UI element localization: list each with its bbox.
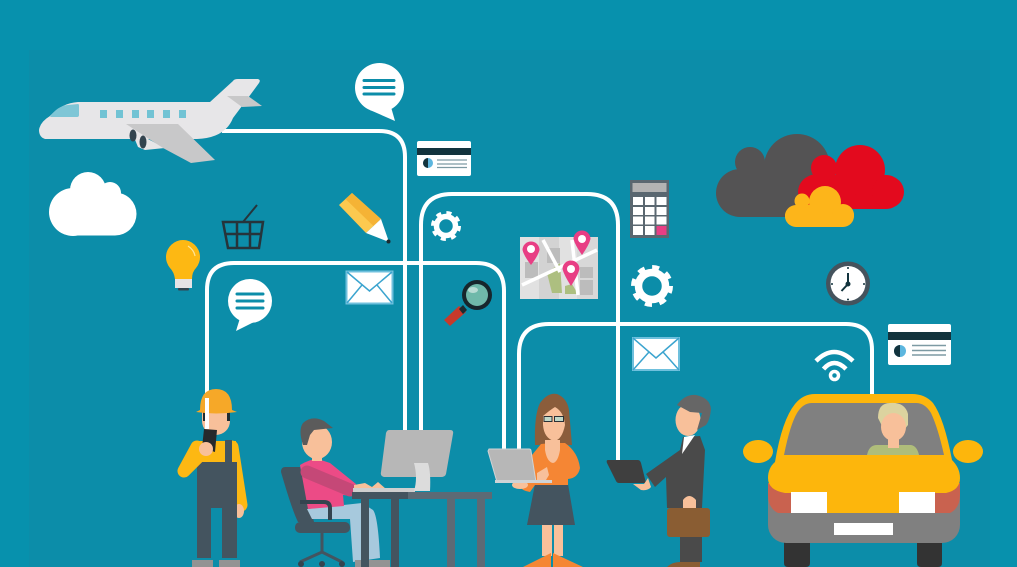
keyboard: [353, 488, 415, 492]
right arm: [232, 447, 241, 505]
chair base: [300, 533, 342, 562]
icon: wifi: [816, 352, 853, 380]
briefcase: [667, 508, 710, 537]
head: [202, 412, 230, 435]
person: woman with laptop: [488, 394, 583, 567]
person: businessman with tablet: [607, 395, 711, 567]
legs: [307, 503, 380, 562]
license plate: [834, 523, 893, 535]
glasses: [544, 416, 564, 422]
top: [518, 443, 580, 492]
desk with monitor: [352, 430, 492, 567]
driver: [867, 403, 919, 455]
mirrors: [743, 440, 773, 463]
icon: envelope left: [346, 272, 392, 304]
skirt: [527, 484, 575, 525]
connector line: drop to worker: [205, 398, 209, 429]
shirt: [300, 459, 356, 509]
monitor stand: [414, 463, 430, 491]
icon: worker phone and hand: [199, 429, 217, 456]
car: [743, 394, 983, 567]
briefcase hand: [683, 496, 696, 509]
connector line: laptop to car: [519, 324, 872, 451]
person: construction worker: [184, 389, 244, 567]
icon: credit card upper: [417, 141, 471, 176]
shoes: [523, 553, 583, 567]
connector line: plane to desktop monitor: [222, 131, 405, 432]
hands: [354, 482, 386, 489]
yellow body: [768, 394, 960, 513]
laptop: [488, 449, 536, 482]
icon: speech bubble upper: [355, 63, 404, 121]
yellow cloud: [785, 186, 854, 227]
icon: shopping basket: [223, 205, 263, 248]
wheels: [784, 540, 942, 567]
hard hat: [196, 389, 237, 414]
icon: magnifying glass: [444, 280, 492, 326]
headlights: [791, 492, 827, 513]
face: [676, 404, 700, 436]
face: [543, 407, 565, 441]
sleeve shading: [307, 472, 350, 490]
icon: large gear: [634, 268, 670, 304]
connector line: worker to laptop: [207, 263, 504, 451]
hair: [677, 395, 711, 430]
hand on keyboard: [537, 467, 549, 480]
icon: pencil: [339, 193, 390, 244]
legs: [680, 537, 702, 562]
icon: calculator: [630, 180, 669, 238]
icon: white cloud: [49, 172, 136, 236]
torso shirt: [195, 441, 236, 465]
icon: clock: [826, 262, 870, 306]
face: [302, 425, 332, 459]
desk legs: [447, 499, 485, 567]
icon: envelope right: [633, 338, 679, 370]
chair arm and seat: [300, 502, 330, 520]
neck: [312, 455, 322, 461]
shoes: [355, 560, 390, 567]
icon: map with pins: [520, 230, 598, 299]
boots: [192, 560, 240, 567]
monitor: [381, 430, 453, 477]
icon: cloud group: [716, 134, 904, 227]
hair: [300, 418, 333, 445]
suit: [646, 436, 705, 508]
left arm: [184, 447, 203, 471]
lower body: [768, 478, 960, 543]
neck opening: [545, 440, 560, 463]
hand: [633, 478, 651, 490]
person: seated man at desk: [281, 418, 390, 567]
windshield: [784, 403, 944, 455]
icon: credit card right: [888, 324, 951, 365]
tablet: [607, 460, 646, 483]
icon: small gear: [433, 213, 459, 239]
legs: [542, 525, 552, 556]
icon: speech bubble lower: [228, 279, 272, 331]
shoe: [667, 562, 700, 567]
icon: light bulb: [166, 240, 200, 290]
collar: [682, 435, 695, 454]
hand under laptop: [512, 481, 528, 489]
airplane: [39, 79, 262, 163]
red cloud: [798, 145, 904, 210]
tail lights: [768, 483, 960, 513]
connector line: desktop monitor to tablet: [421, 194, 618, 462]
hair: [535, 394, 572, 445]
dark cloud: [716, 134, 830, 217]
chair back: [281, 467, 314, 522]
desk top: [352, 492, 492, 499]
overalls: [197, 440, 237, 558]
